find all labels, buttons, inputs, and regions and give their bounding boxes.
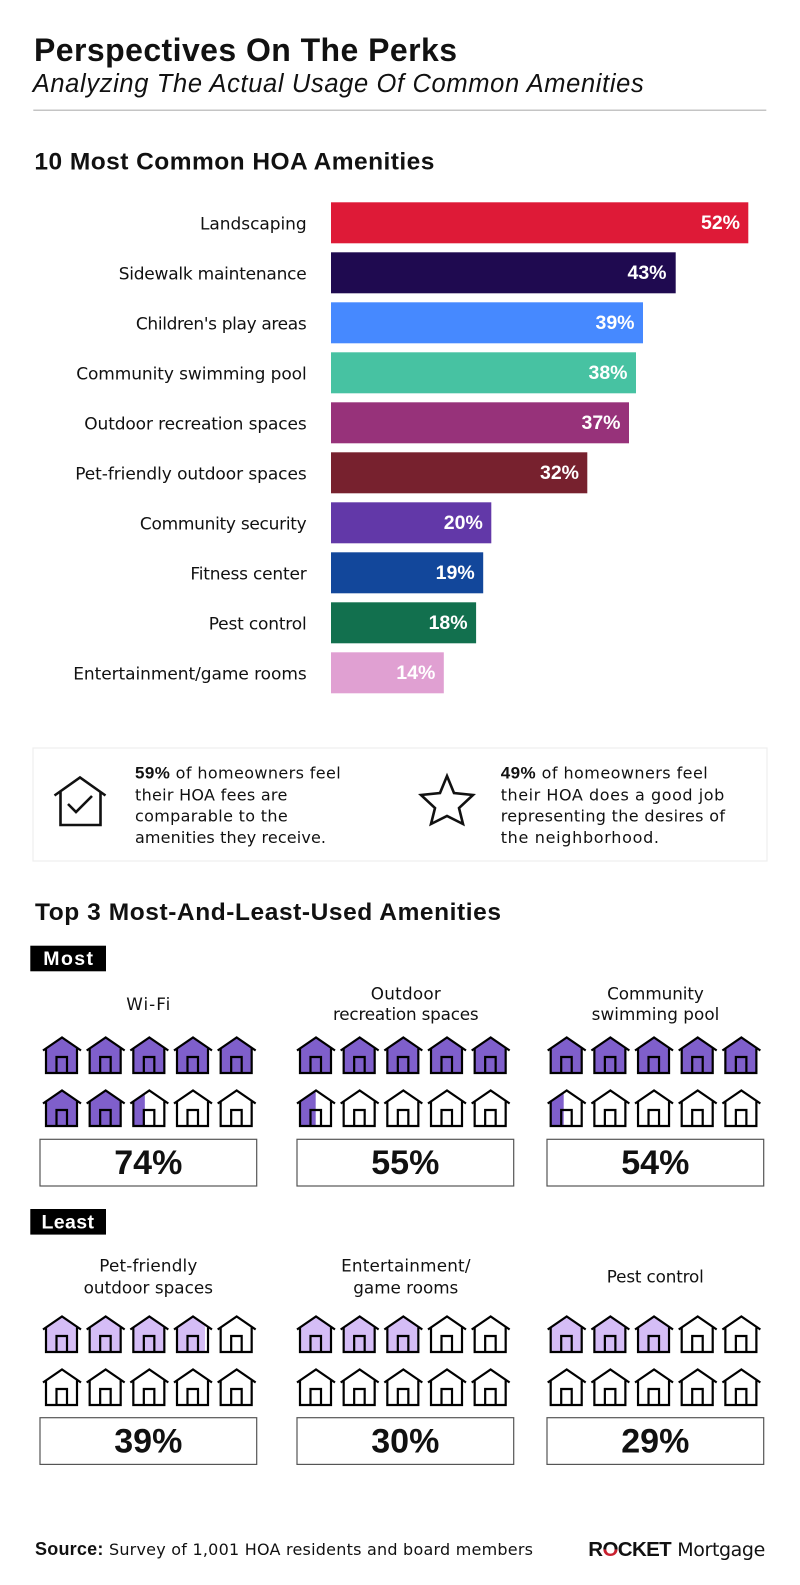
panel: Pet-friendly outdoor spaces 39%: Pet-friendly xyxy=(99,1256,197,1276)
bar: Sidewalk maintenance: Sidewalk maintenance xyxy=(119,264,307,284)
panel: Pet-friendly outdoor spaces 39%: 39% xyxy=(114,1422,182,1460)
heading: 10 most common amenities: 10 Most Common HOA Amenities xyxy=(34,148,434,175)
callout text: representation: their HOA does a good job xyxy=(501,785,724,804)
panel: Pest control 29% xyxy=(547,1266,764,1464)
panel: Community swimming pool 54%: 54% xyxy=(621,1144,689,1182)
logo: Rocket Mortgage: ROCKET xyxy=(588,1538,672,1561)
title: Perspectives On The Perks xyxy=(34,32,457,68)
bar: Pet-friendly outdoor spaces: 32% xyxy=(540,462,579,484)
panel: Pet-friendly outdoor spaces 39% xyxy=(40,1256,257,1464)
bar: Fitness center xyxy=(190,552,483,593)
bar: Community swimming pool xyxy=(76,352,636,393)
tag: Least: Least xyxy=(42,1211,94,1233)
tag: Most xyxy=(30,946,106,971)
source note: Source: Survey of 1,001 HOA residents and board members xyxy=(35,1539,533,1559)
panel: Community swimming pool 54%: swimming pool xyxy=(592,1004,719,1024)
callout text: representation: the neighborhood. xyxy=(501,828,659,847)
logo: Rocket Mortgage: Mortgage xyxy=(677,1539,765,1561)
bar: Outdoor recreation spaces: Outdoor recreation spaces xyxy=(84,414,307,434)
bar: Sidewalk maintenance xyxy=(119,252,676,293)
panel: Wi-Fi 74% xyxy=(40,994,257,1186)
callout text: fees: 59% of homeowners feel xyxy=(135,764,341,783)
bar: Community security: 20% xyxy=(444,512,483,534)
bar: Children's play areas: Children's play areas xyxy=(136,314,307,334)
panel: Entertainment/game rooms 30%: Entertainment/ xyxy=(341,1256,471,1276)
bar: Entertainment/game rooms xyxy=(73,652,444,693)
bar: Entertainment/game rooms: Entertainment/game rooms xyxy=(73,664,307,684)
bar: Entertainment/game rooms: 14% xyxy=(396,662,435,684)
panel: Community swimming pool 54%: Community xyxy=(607,984,704,1004)
bar: Community security: Community security xyxy=(140,514,307,534)
bar: Outdoor recreation spaces: 37% xyxy=(581,412,620,434)
bar: Pest control xyxy=(209,602,476,643)
bar: Fitness center: 19% xyxy=(436,562,475,584)
panel: Outdoor recreation spaces 55%: 55% xyxy=(371,1144,439,1182)
panel: Outdoor recreation spaces 55% xyxy=(296,984,514,1186)
callout text: representation: 49% of homeowners feel xyxy=(501,764,708,783)
panel: Pest control 29%: Pest control xyxy=(607,1266,704,1286)
logo: Rocket Mortgage xyxy=(588,1538,765,1561)
tag: Least xyxy=(30,1209,106,1235)
bar: Pet-friendly outdoor spaces xyxy=(75,452,587,493)
bar: Pest control: 18% xyxy=(429,612,468,634)
callout text: fees: their HOA fees are xyxy=(135,785,287,804)
callout text: fees xyxy=(135,764,341,847)
callout panel xyxy=(33,748,767,861)
bar: Children's play areas: 39% xyxy=(595,312,634,334)
panel: Wi-Fi 74%: Wi-Fi xyxy=(126,994,170,1014)
bar: Landscaping xyxy=(200,202,748,243)
panel: Pet-friendly outdoor spaces 39%: outdoor spaces xyxy=(84,1278,213,1298)
callout text: fees: amenities they receive. xyxy=(135,828,326,847)
callout text: fees: comparable to the xyxy=(135,807,288,826)
bar: Fitness center: Fitness center xyxy=(190,564,307,584)
panel: Wi-Fi 74%: 74% xyxy=(114,1144,182,1182)
tag: Most: Most xyxy=(43,948,94,970)
bar chart xyxy=(73,202,748,693)
panel: Entertainment/game rooms 30% xyxy=(296,1256,514,1464)
panel: Community swimming pool 54% xyxy=(547,984,764,1186)
bar: Community security xyxy=(140,502,491,543)
bar: Community swimming pool: Community swimming pool xyxy=(76,364,307,384)
icon: star xyxy=(421,776,473,824)
bar: Community swimming pool: 38% xyxy=(588,362,628,384)
bar: Sidewalk maintenance: 43% xyxy=(627,262,666,284)
bar: Landscaping: 52% xyxy=(701,212,740,234)
bar: Pest control: Pest control xyxy=(209,614,307,634)
icon: house with check xyxy=(54,778,106,825)
subtitle: Analyzing The Actual Usage Of Common Amenities xyxy=(31,70,644,98)
heading: top 3: Top 3 Most-And-Least-Used Amenities xyxy=(35,899,501,926)
bar: Landscaping: Landscaping xyxy=(200,214,307,234)
callout text: representation xyxy=(501,764,725,847)
bar: Pet-friendly outdoor spaces: Pet-friendly outdoor spaces xyxy=(75,464,307,484)
bar: Outdoor recreation spaces xyxy=(84,402,629,443)
panel: Outdoor recreation spaces 55%: recreation spaces xyxy=(333,1004,479,1024)
panel: Entertainment/game rooms 30%: game rooms xyxy=(353,1278,458,1298)
panel: Pest control 29%: 29% xyxy=(621,1422,689,1460)
callout text: representation: representing the desires of xyxy=(501,807,725,826)
bar: Children's play areas xyxy=(136,302,643,343)
panel: Outdoor recreation spaces 55%: Outdoor xyxy=(371,984,441,1004)
panel: Entertainment/game rooms 30%: 30% xyxy=(371,1422,439,1460)
